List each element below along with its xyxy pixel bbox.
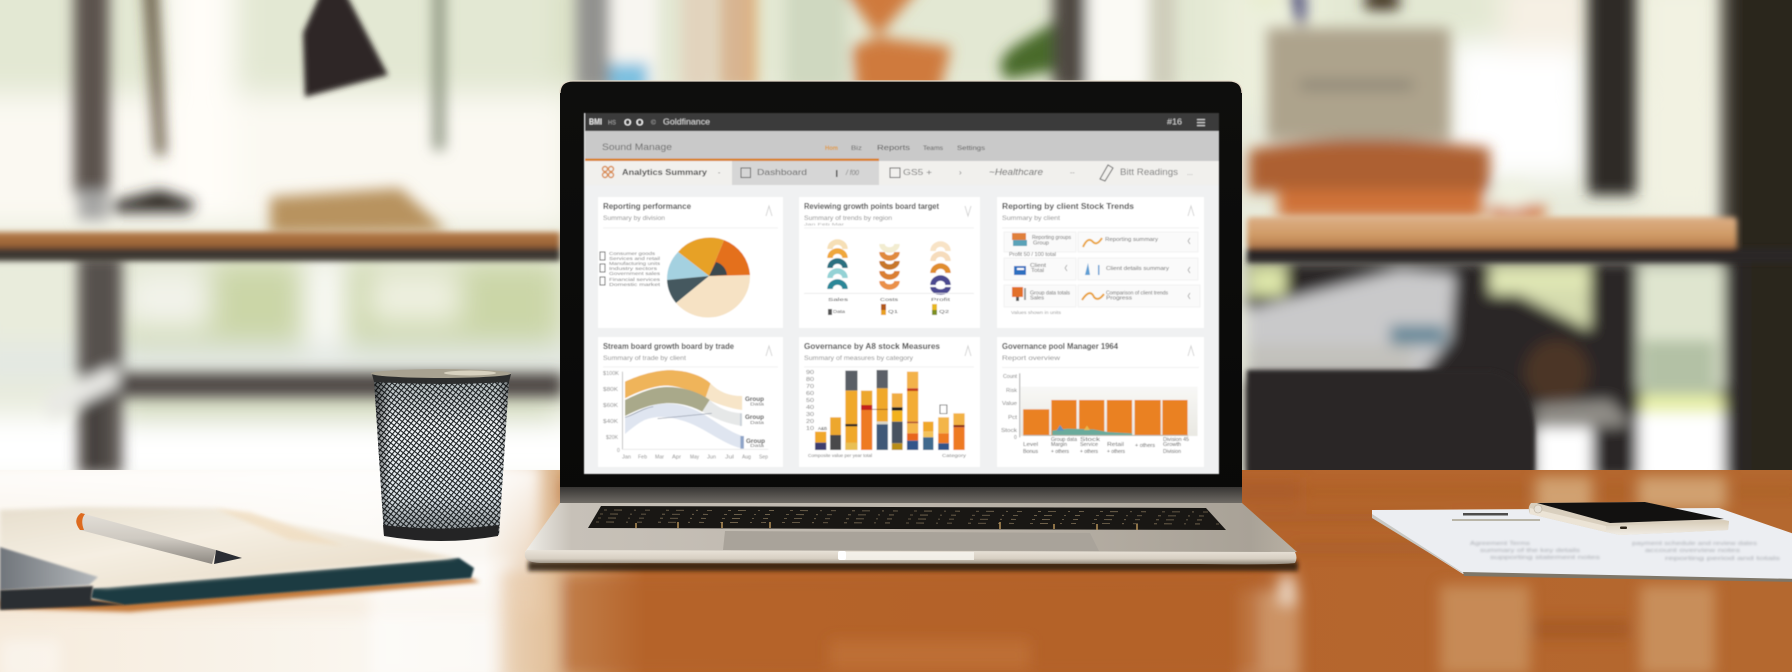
panel: stacked bar chart card: 40 bbox=[806, 405, 814, 411]
panel: metric tiles card: Comparison of client trends bbox=[1106, 290, 1168, 296]
arc labels: Data bbox=[833, 309, 845, 315]
grey navigation bar: Biz bbox=[851, 146, 862, 152]
panel: stacked bar chart card: Category bbox=[942, 453, 967, 458]
icon: blue box bbox=[1014, 266, 1026, 275]
toolbar with tabs: / f00 bbox=[845, 170, 859, 177]
panel: stream area chart card: Jul bbox=[725, 454, 734, 460]
arc labels: Q1 bbox=[888, 309, 899, 315]
panel: metric tiles card: Reporting groups bbox=[1032, 235, 1072, 241]
panel: orange bars card: + others bbox=[1107, 449, 1125, 455]
panel: stream area chart card: $40K bbox=[603, 419, 619, 425]
toolbar with tabs: ~Healthcare bbox=[989, 167, 1043, 177]
panel: stream area chart card: Mar bbox=[655, 454, 664, 460]
panel: stream area chart card: Jan bbox=[622, 454, 631, 460]
panel: stream area chart card: Group bbox=[745, 415, 764, 421]
panel: pie chart card bbox=[598, 197, 783, 328]
folder shadow bbox=[0, 578, 480, 612]
panel: stream area chart card: Sep bbox=[759, 454, 768, 460]
panel: metric tiles card: Group bbox=[1033, 240, 1049, 246]
panel: stacked bar chart card: 50 bbox=[806, 398, 814, 404]
grey navigation bar bbox=[585, 131, 1219, 161]
grey navigation bar: Reports bbox=[877, 145, 911, 152]
smartphone bbox=[1529, 502, 1729, 535]
pen bbox=[76, 513, 242, 564]
panel: metric tiles card: Progress bbox=[1106, 296, 1133, 302]
panel: stream area chart card: $20K bbox=[606, 435, 619, 441]
panel: metric tiles card bbox=[997, 197, 1204, 328]
panel: metric tiles card: Total bbox=[1031, 268, 1044, 274]
panel: stacked bar chart card bbox=[799, 337, 980, 467]
cream folder page bbox=[0, 507, 457, 588]
panel: orange bars card: Margin bbox=[1051, 442, 1067, 448]
panel: stacked bar chart card: Composite value per year total bbox=[808, 453, 872, 458]
panel: stacked bar chart card: Governance by A8 stock Measures bbox=[804, 342, 941, 351]
panel: stacked arcs card: Reviewing growth points board target bbox=[804, 202, 939, 211]
panel: orange bars card: Stock bbox=[1001, 428, 1018, 434]
pie legend: Government sales bbox=[609, 271, 661, 277]
tan surface on the left shelf bbox=[270, 188, 448, 234]
icon: black desk lamp shade bbox=[303, 0, 388, 97]
panel: orange bars card: Bonus bbox=[1023, 449, 1039, 455]
shadow under the laptop bbox=[528, 561, 1298, 571]
arc labels: Costs bbox=[880, 297, 899, 303]
panel: stacked arcs card: Summary of trends by region bbox=[804, 215, 892, 222]
panel: stream area chart card bbox=[598, 337, 783, 467]
pie legend: Domestic market bbox=[609, 282, 661, 288]
app title bar: © bbox=[651, 118, 656, 126]
panel: stream area chart card: Apr bbox=[672, 454, 681, 460]
panel: stacked bar chart card: 60 bbox=[806, 391, 814, 397]
wire mesh pencil cup bbox=[370, 369, 515, 541]
panel: orange bars card: Risk bbox=[1006, 388, 1018, 394]
panel: orange bars card: + others bbox=[1080, 449, 1098, 455]
blurred office background bbox=[0, 0, 1792, 490]
panel: stream area chart card: May bbox=[690, 454, 699, 460]
document text: reporting period and totals bbox=[1665, 556, 1780, 562]
panel: orange bars card: Level bbox=[1023, 442, 1038, 448]
under the right shelf bbox=[1247, 260, 1747, 480]
panel: stream area chart card: Group bbox=[745, 397, 764, 403]
panel: stream area chart card: 0 bbox=[617, 448, 620, 454]
panel: stream area chart card: Jun bbox=[707, 454, 716, 460]
document text: summary of the key details bbox=[1480, 548, 1580, 554]
panel: orange bars card: Governance pool Manager 1964 bbox=[1002, 342, 1119, 351]
panel: stacked bar chart card: 80 bbox=[806, 377, 814, 383]
app title bar: O bbox=[636, 118, 643, 128]
arc column one bbox=[830, 242, 845, 289]
panel: orange bars card: Division bbox=[1163, 449, 1181, 455]
panel: metric tiles card: Reporting summary bbox=[1105, 237, 1158, 243]
left posts bbox=[74, 0, 109, 195]
icon: gold wave bbox=[1083, 238, 1102, 247]
laptop base bbox=[525, 503, 1298, 571]
document sheet on the table bbox=[1372, 508, 1792, 582]
panel: metric tiles card: Reporting by client Stock Trends bbox=[1002, 202, 1135, 211]
stream bands bbox=[622, 370, 768, 449]
panel: stream area chart card: Feb bbox=[638, 454, 647, 460]
lower dark rail bbox=[118, 373, 563, 397]
dashboard screen bbox=[584, 113, 1219, 474]
panel: stacked bar chart card: 20 bbox=[806, 419, 814, 425]
panel: stream area chart card: $100K bbox=[603, 371, 620, 377]
toolbar with tabs: ... bbox=[1187, 170, 1193, 177]
pie chart bbox=[667, 237, 750, 317]
keyboard bbox=[588, 506, 1226, 530]
pie legend: Financial services bbox=[609, 277, 661, 283]
panel: stacked bar chart card: Summary of measures by category bbox=[804, 355, 914, 362]
arc column two bbox=[882, 244, 897, 287]
front lip bbox=[525, 550, 1296, 564]
icon: orange and teal chart bbox=[1012, 233, 1027, 246]
panel: metric tiles card: Client details summary bbox=[1106, 266, 1169, 272]
toolbar with tabs: -- bbox=[1070, 170, 1075, 177]
top centre books and vase bbox=[576, 0, 610, 90]
panel: orange bars card: Pct bbox=[1008, 415, 1018, 421]
wooden shelves bbox=[0, 217, 1792, 263]
document text: supporting statement notes bbox=[1490, 555, 1600, 561]
toolbar with tabs: - bbox=[718, 170, 721, 177]
panel: stacked bar chart card: 30 bbox=[806, 412, 814, 418]
panel: pie chart card: Summary by division bbox=[603, 215, 665, 222]
pie legend: Manufacturing units bbox=[609, 261, 661, 267]
icon: blue bars bbox=[1085, 263, 1100, 275]
app title bar: Goldfinance bbox=[663, 118, 711, 126]
app title bar: O bbox=[624, 118, 631, 128]
notebook folder with pen and tablet bbox=[0, 507, 480, 612]
panel: stacked bar chart card: A&B bbox=[818, 426, 827, 431]
icon: orange flower bbox=[602, 166, 614, 178]
dark folder cover bbox=[91, 558, 474, 605]
toolbar with tabs: › bbox=[959, 168, 962, 177]
stacked bars bbox=[815, 370, 965, 450]
document text: payment schedule and review dates bbox=[1632, 541, 1757, 547]
panel: stream area chart card: $60K bbox=[603, 403, 619, 409]
panel: stream area chart card: $80K bbox=[603, 387, 619, 393]
document text: account overview notes bbox=[1645, 548, 1740, 554]
icon: second gold wave bbox=[1082, 293, 1104, 300]
arc column three bbox=[933, 244, 948, 292]
heading: Reporting performance bbox=[603, 202, 692, 211]
toolbar with tabs: GS5 + bbox=[903, 168, 932, 177]
arc labels: Profit bbox=[931, 297, 951, 303]
panel: stream area chart card: Summary of trade by client bbox=[603, 355, 686, 362]
panel: stream area chart card: Stream board growth board by trade bbox=[603, 342, 735, 351]
pie legend: Consumer goods bbox=[609, 251, 656, 257]
grey navigation bar: Settings bbox=[957, 146, 985, 152]
trackpad bbox=[723, 531, 1099, 551]
grey navigation bar: Teams bbox=[923, 146, 943, 152]
wooden table bbox=[0, 465, 1792, 672]
panel: stacked arcs card: Jan Feb Mar bbox=[804, 222, 846, 226]
app title bar: #16 bbox=[1167, 118, 1183, 126]
orange bars bbox=[1020, 373, 1198, 437]
metric tile backgrounds bbox=[1004, 232, 1200, 307]
panel: stacked bar chart card: 70 bbox=[806, 384, 814, 390]
pie legend: Services and retail bbox=[609, 256, 660, 262]
panel: stream area chart card: Aug bbox=[742, 454, 751, 460]
panel: stream area chart card: Data bbox=[750, 420, 765, 425]
grey navigation bar: Sound Manage bbox=[602, 142, 672, 152]
panel: stacked bar chart card: 90 bbox=[806, 370, 814, 376]
panel: metric tiles card: Profit 50 / 100 total bbox=[1009, 252, 1056, 258]
pie legend bbox=[600, 251, 661, 288]
app title bar: BMI bbox=[589, 118, 602, 126]
panel: orange bars card: Group data bbox=[1051, 437, 1077, 443]
icon: orange block chart bbox=[1012, 287, 1026, 301]
panel: orange bars card: Service bbox=[1080, 442, 1098, 448]
arc labels bbox=[828, 297, 951, 315]
panel: metric tiles card: Client bbox=[1030, 263, 1047, 269]
document text bbox=[1470, 541, 1780, 562]
panel: metric tiles card: Sales bbox=[1030, 296, 1045, 302]
toolbar with tabs: Bitt Readings bbox=[1120, 167, 1179, 177]
toolbar with tabs: Analytics Summary bbox=[622, 168, 708, 177]
app title bar bbox=[585, 113, 1219, 131]
panel: metric tiles card: Values shown in units bbox=[1011, 310, 1062, 315]
dark office chair bbox=[1247, 370, 1535, 478]
pie legend: Industry sectors bbox=[609, 266, 658, 272]
document text: Agreement Terms bbox=[1470, 541, 1530, 547]
panel: orange bars card: Report overview bbox=[1002, 355, 1060, 362]
panel: orange bars card: + others bbox=[1135, 443, 1156, 449]
panel: orange bars card: + others bbox=[1051, 449, 1069, 455]
arc labels: Q2 bbox=[939, 309, 950, 315]
panel: metric tiles card: Summary by client bbox=[1002, 215, 1060, 222]
panel: orange bars card: Growth bbox=[1163, 442, 1181, 448]
panel: metric tiles card: Group data totals bbox=[1030, 290, 1071, 296]
panel: orange bars card: 0 bbox=[1014, 435, 1017, 441]
arc labels: Sales bbox=[828, 297, 849, 303]
panel: stacked arcs card bbox=[799, 197, 980, 328]
panel: orange bars card: Retail bbox=[1107, 442, 1124, 448]
right background bbox=[1290, 0, 1305, 25]
panel: orange bars card: Count bbox=[1003, 374, 1018, 380]
toolbar with tabs bbox=[585, 161, 1219, 185]
panel: stream area chart card: Data bbox=[750, 443, 765, 448]
grey navigation bar: Hom bbox=[825, 146, 838, 152]
panel: orange bars card bbox=[997, 337, 1204, 467]
panel: stream area chart card: Group bbox=[746, 439, 765, 445]
laptop lid bbox=[560, 81, 1242, 503]
panel: orange bars card: Stock bbox=[1080, 437, 1101, 443]
tablet bbox=[0, 547, 98, 590]
deck bbox=[525, 503, 1297, 552]
app title bar: HS bbox=[608, 120, 616, 126]
panel: orange bars card: Division 45 bbox=[1163, 437, 1189, 443]
panel: orange bars card: Value bbox=[1002, 401, 1017, 407]
panel: stream area chart card: Data bbox=[750, 402, 765, 406]
panel: stacked bar chart card: 10 bbox=[806, 426, 814, 432]
toolbar with tabs: Dashboard bbox=[757, 168, 807, 177]
hinge bbox=[560, 487, 1242, 503]
